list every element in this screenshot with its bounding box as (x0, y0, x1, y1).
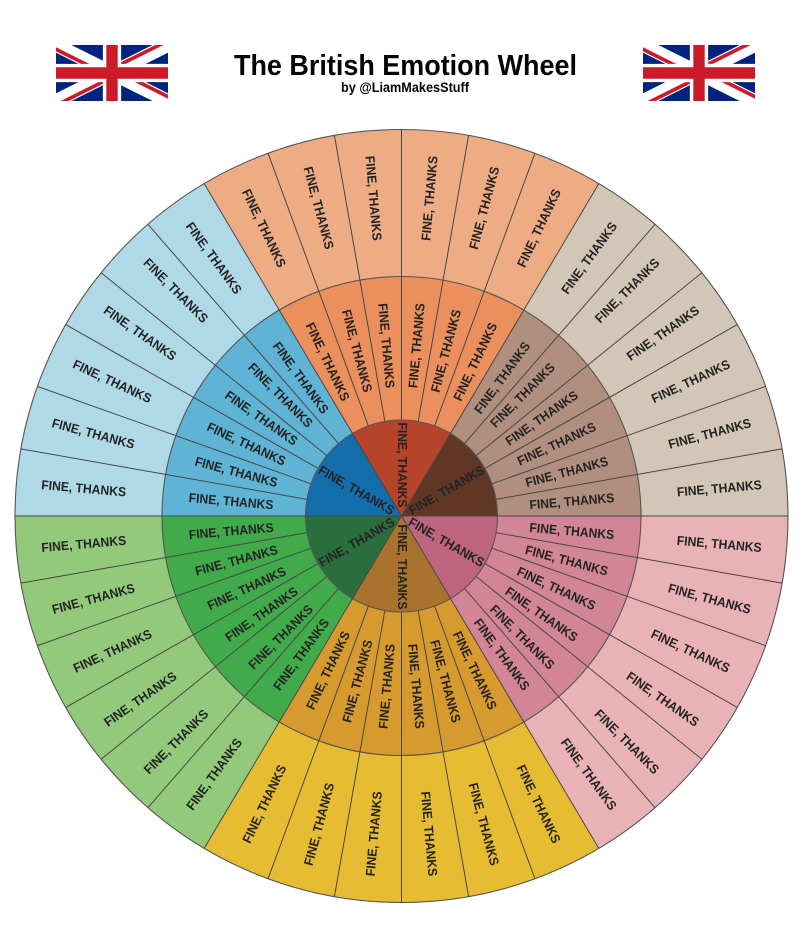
outer ring: yellow: FINE, THANKS (418, 791, 440, 877)
middle ring: pink: FINE, THANKS (529, 520, 615, 542)
icon: right Union Jack flag (643, 45, 755, 101)
emotion wheel (15, 130, 788, 902)
sector: green (15, 514, 402, 848)
outer ring: pink: FINE, THANKS (676, 533, 763, 555)
middle ring: pink: FINE, THANKS (515, 564, 598, 613)
middle ring: green: FINE, THANKS (205, 563, 289, 613)
outer ring: light blue (15, 184, 279, 516)
middle ring: orange: FINE, THANKS (303, 320, 353, 404)
outer ring: tan: FINE, THANKS (592, 255, 663, 326)
outer ring: pink: FINE, THANKS (649, 626, 733, 676)
sector: pink (402, 514, 788, 848)
outer ring: tan: FINE, THANKS (676, 477, 763, 499)
middle ring: blue (162, 310, 352, 516)
inner wedge: rose: FINE, THANKS (406, 514, 487, 570)
sector: blue (15, 184, 402, 518)
outer ring: orange: FINE, THANKS (466, 165, 502, 251)
outer ring: light blue: FINE, THANKS (101, 303, 180, 364)
middle ring: taupe: FINE, THANKS (503, 387, 581, 449)
middle ring: pink: FINE, THANKS (487, 602, 558, 673)
middle ring: taupe: FINE, THANKS (487, 360, 558, 431)
outer ring: pink: FINE, THANKS (592, 706, 663, 777)
middle ring: taupe: FINE, THANKS (471, 339, 533, 417)
inner wedge: ochre brown: FINE, THANKS (395, 524, 410, 610)
inner wedge: dark brown: FINE, THANKS (406, 462, 487, 518)
outer ring: yellow: FINE, THANKS (514, 762, 564, 846)
sector: yellow (204, 516, 599, 902)
outer ring: tan: FINE, THANKS (649, 356, 733, 406)
outer ring: light blue: FINE, THANKS (50, 415, 137, 452)
middle ring: taupe: FINE, THANKS (524, 454, 610, 490)
middle ring: green: FINE, THANKS (222, 583, 301, 645)
outer ring: light blue: FINE, THANKS (71, 357, 154, 406)
middle ring: blue: FINE, THANKS (205, 419, 288, 469)
outer ring: yellow: FINE, THANKS (363, 790, 385, 877)
middle ring: green (162, 516, 352, 722)
icon: left Union Jack flag (56, 45, 168, 101)
middle ring: orange (279, 277, 524, 433)
middle ring: green: FINE, THANKS (270, 615, 332, 693)
middle ring: pink (450, 516, 641, 722)
outer ring: tan: FINE, THANKS (558, 219, 620, 297)
middle ring: gold: FINE, THANKS (376, 643, 398, 729)
middle ring: blue: FINE, THANKS (270, 339, 332, 417)
inner wedge: red (352, 420, 450, 516)
outer ring: green: FINE, THANKS (71, 626, 154, 676)
outer ring: orange: FINE, THANKS (514, 186, 564, 270)
inner wedge: dark green (306, 514, 402, 599)
inner wedge: dark brown (402, 433, 498, 518)
middle ring: pink: FINE, THANKS (524, 542, 610, 579)
outer ring: tan (524, 184, 788, 516)
outer ring: green: FINE, THANKS (101, 668, 180, 730)
inner wedge: deep blue: FINE, THANKS (316, 462, 397, 518)
middle ring: orange: FINE, THANKS (339, 308, 375, 394)
middle ring: blue: FINE, THANKS (188, 490, 274, 512)
middle ring: blue: FINE, THANKS (245, 360, 316, 431)
middle ring: taupe: FINE, THANKS (515, 419, 598, 469)
outer ring: light blue: FINE, THANKS (141, 255, 211, 326)
middle ring: green: FINE, THANKS (188, 520, 274, 542)
sector: orange (204, 130, 599, 516)
outer ring: green: FINE, THANKS (141, 706, 212, 777)
outer ring: orange (204, 130, 599, 310)
inner wedge: rose (402, 514, 498, 599)
outer ring: light blue: FINE, THANKS (183, 219, 245, 297)
outer ring: orange: FINE, THANKS (239, 187, 289, 270)
middle ring: green: FINE, THANKS (245, 601, 316, 672)
outer ring: yellow: FINE, THANKS (301, 781, 337, 867)
middle ring: gold: FINE, THANKS (303, 629, 353, 712)
outer ring: light blue: FINE, THANKS (41, 477, 127, 499)
outer ring: green (15, 516, 279, 848)
middle ring: blue: FINE, THANKS (193, 454, 280, 490)
inner wedge: ochre brown (352, 516, 450, 612)
inner wedge: red: FINE, THANKS (395, 422, 410, 508)
outer ring: green: FINE, THANKS (183, 735, 245, 813)
subtitle: by @LiamMakesStuff (341, 80, 469, 95)
outer ring: yellow: FINE, THANKS (239, 762, 289, 846)
middle ring: taupe (450, 310, 641, 516)
middle ring: taupe: FINE, THANKS (529, 490, 615, 512)
middle ring: pink: FINE, THANKS (502, 584, 581, 645)
outer ring: pink: FINE, THANKS (624, 669, 702, 730)
middle ring: orange: FINE, THANKS (428, 308, 464, 394)
middle ring: gold (279, 599, 524, 755)
outer ring: yellow (204, 722, 599, 902)
middle ring: gold: FINE, THANKS (450, 629, 500, 712)
middle ring: orange: FINE, THANKS (405, 302, 428, 389)
outer ring: yellow: FINE, THANKS (466, 781, 502, 867)
outer ring: green: FINE, THANKS (41, 533, 127, 555)
middle ring: gold: FINE, THANKS (405, 643, 428, 730)
middle ring: gold: FINE, THANKS (339, 638, 376, 724)
middle ring: pink: FINE, THANKS (471, 616, 533, 693)
outer ring: pink (524, 516, 788, 848)
outer ring: orange: FINE, THANKS (418, 155, 441, 241)
middle ring: blue: FINE, THANKS (222, 387, 301, 449)
outer ring: green: FINE, THANKS (50, 580, 137, 617)
outer ring: pink: FINE, THANKS (558, 735, 620, 813)
outer ring: tan: FINE, THANKS (624, 302, 702, 364)
inner wedge: deep blue (306, 433, 402, 518)
outer ring: orange: FINE, THANKS (362, 155, 385, 242)
middle ring: orange: FINE, THANKS (375, 303, 398, 389)
outer ring: orange: FINE, THANKS (301, 165, 337, 251)
title: The British Emotion Wheel (234, 50, 577, 82)
inner wedge: dark green: FINE, THANKS (316, 514, 397, 570)
middle ring: gold: FINE, THANKS (427, 638, 464, 724)
middle ring: orange: FINE, THANKS (450, 320, 500, 403)
outer ring: pink: FINE, THANKS (667, 580, 753, 617)
outer ring: tan: FINE, THANKS (667, 415, 753, 452)
middle ring: green: FINE, THANKS (193, 542, 280, 579)
sector: tan (402, 184, 788, 518)
